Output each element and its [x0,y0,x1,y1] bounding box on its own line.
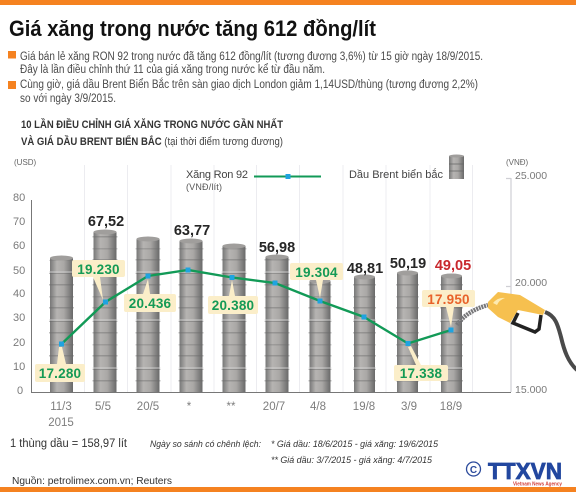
callout 17.950: 17.950 [427,292,470,307]
barrel ** [222,244,246,392]
legend: petrol: Xăng Ron 92 [186,169,248,181]
metal spout [457,305,488,325]
fuel nozzle icon [457,292,576,370]
left axis: USD [13,158,37,397]
left axis: USD: 20 [13,337,25,349]
bullet: second [8,81,16,89]
barrel 5/5 [92,230,118,392]
barrel 18/9 [440,274,463,392]
barrel conversion note: 1 thùng dầu = 158,97 lít [10,438,128,450]
x-axis labels: 20/7 [263,401,285,413]
barrel 3/9 [396,270,419,392]
date notes: ** Giá dầu: 3/7/2015 - giá xăng: 4/7/2015 [271,455,433,466]
callout 19.304: 19.304 [295,265,338,280]
chart heading: 10 LẦN ĐIỀU CHỈNH GIÁ XĂNG TRONG NƯỚC GẦN NHẤT [21,118,283,131]
legend: Brent: Dầu Brent biển bắc [349,168,444,181]
handle highlight [493,298,505,305]
legend [186,154,464,192]
combined chart [13,154,576,429]
legend: petrol: (VNĐ/lít) [186,182,222,192]
barrel 20/5 [136,236,160,392]
left axis: USD: 60 [13,240,25,252]
callout 17.338 [394,346,448,381]
x-axis labels: 19/8 [353,401,375,413]
paragraph: Brent price: Cùng giờ, giá dầu Brent Biển Bắc trên sàn giao dịch London giảm 1,14USD/thùng (tương đương 2,2%) [20,78,478,91]
x-axis labels: 18/9 [440,401,462,413]
right axis: VND: 15.000 [515,384,547,396]
date notes: * Giá dầu: 18/6/2015 - giá xăng: 19/6/2015 [271,439,439,450]
title: Giá xăng trong nước tăng 612 đồng/lít [9,16,376,41]
logo: TTXVN: TTXVN [488,458,562,484]
baseline axis [31,392,511,394]
x-axis labels: 2015 [48,417,74,429]
callout 17.280 [35,347,85,382]
chart heading: VÀ GIÁ DẦU BRENT BIỂN BẮC (tại thời điểm tương đương) [21,135,283,148]
callout 17.280: 17.280 [39,366,81,381]
right axis: VND [506,158,547,396]
x-axis labels: ** [227,401,236,413]
left axis: USD: 50 [13,265,25,277]
vertical separators [84,165,472,392]
right axis: VND: 20.000 [515,277,547,289]
x-axis labels: 5/5 [95,401,111,413]
left axis: USD: 40 [13,288,25,300]
x-axis labels: 3/9 [401,401,417,413]
left axis: USD: 70 [13,216,25,228]
x-axis labels: 11/3 [50,401,72,413]
barrel 19/8 [353,274,376,392]
legend: Brent [349,154,464,181]
Brent value labels: 48,81 [347,261,383,277]
x-axis labels: 20/5 [137,401,159,413]
source: Nguồn: petrolimex.com.vn; Reuters [12,475,172,487]
summary text block [8,51,483,105]
trigger guard [513,313,541,332]
callout 17.338: 17.338 [400,366,443,381]
right axis: VND: 25.000 [515,170,547,182]
chart heading [21,118,283,148]
left axis: USD: 10 [13,361,25,373]
hose [545,312,576,370]
barrel 4/8 [308,278,332,392]
logo: TTXVN: C [470,465,477,476]
callout 19.304 [290,263,343,298]
logo: TTXVN: Vietnam News Agency [513,482,562,488]
left axis: USD: (USD) [14,158,37,167]
x-axis labels: * [187,401,192,413]
data points [59,268,454,346]
legend: petrol [186,169,321,192]
paragraph: petrol price: Giá bán lẻ xăng RON 92 trong nước đã tăng 612 đồng/lít (tương đương 3,6%) từ 15 giờ ngày 18/9/2015. [20,51,483,63]
barrel * [178,238,204,392]
x-axis labels: 4/8 [310,401,326,413]
paragraph: eleventh adjustment: Đây là lần điều chỉnh thứ 11 của giá xăng trong nước kể từ đầu năm. [20,64,325,76]
petrol price line [59,268,454,346]
top orange bar [0,0,576,5]
callout 19.230: 19.230 [77,262,120,277]
Brent value labels: 67,52 [88,214,124,230]
handle [488,292,545,323]
logo: TTXVN [466,458,562,488]
callout 20.436 [124,279,176,312]
callout 19.230 [72,260,125,300]
x-axis labels [48,401,462,429]
date notes: Ngày so sánh có chênh lệch: [150,439,261,450]
left axis: USD: 30 [13,312,25,324]
Brent value labels: 49,05 [435,258,471,274]
barrels: Brent oil price [49,230,463,392]
Brent value labels [88,214,471,277]
callout 20.380 [208,280,258,314]
barrel 20/7 [264,254,290,392]
callout 17.950 [422,290,475,327]
Brent value labels: 50,19 [390,256,426,272]
left axis: USD: 80 [13,192,25,204]
callout 20.436: 20.436 [129,296,172,311]
petrol price callouts [35,260,475,382]
Brent value labels: 63,77 [174,223,210,239]
right axis: VND: (VNĐ) [506,158,529,167]
barrel 11/3 [49,256,74,392]
date notes [150,439,439,466]
callout 20.380: 20.380 [212,298,254,313]
left axis: USD: 0 [17,385,23,397]
paragraph: comparison date: so với ngày 3/9/2015. [20,93,116,105]
Brent value labels: 56,98 [259,240,295,256]
bullet: first [8,51,16,58]
bottom orange bar [0,487,576,492]
